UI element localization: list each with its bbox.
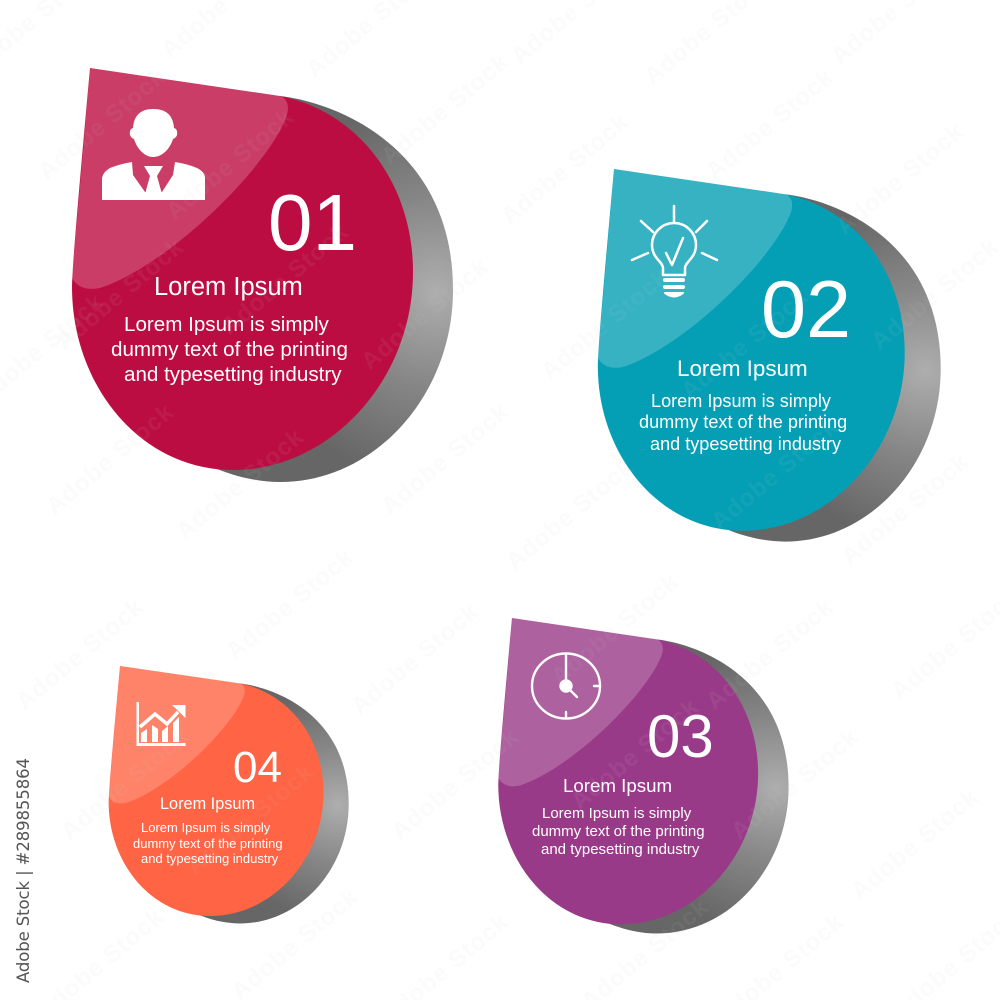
watermark: Adobe Stock	[161, 103, 299, 225]
watermark: Adobe Stock	[11, 593, 149, 715]
watermark: Adobe Stock	[376, 48, 514, 170]
body text 04: dummy text of the printing	[133, 836, 283, 851]
watermark: Adobe Stock	[386, 723, 524, 845]
body text 03	[532, 805, 705, 858]
icon: light bulb with check	[632, 206, 717, 296]
body text 04: Lorem Ipsum is simply	[141, 820, 271, 835]
watermark: Adobe Stock	[496, 108, 634, 230]
watermark: Adobe Stock	[836, 448, 974, 570]
watermark: Adobe Stock	[221, 543, 359, 665]
panel: step 01	[72, 68, 453, 482]
watermark: Adobe Stock	[346, 598, 484, 720]
number 01: 01	[268, 178, 357, 267]
watermark: Adobe Stock	[701, 593, 839, 715]
watermark: Adobe Stock	[216, 218, 354, 340]
drop shape 03	[498, 618, 789, 933]
body text 03: and typesetting industry	[541, 841, 700, 858]
watermark: Adobe Stock	[56, 723, 194, 845]
watermark: Adobe Stock	[356, 253, 494, 375]
body text 01	[111, 313, 348, 386]
watermark: Adobe Stock	[181, 758, 319, 880]
body text 02: dummy text of the printing	[639, 412, 847, 432]
drop shape 04	[109, 666, 349, 924]
watermark: Adobe Stock	[546, 568, 684, 690]
watermark: Adobe Stock	[51, 233, 189, 355]
watermark: Adobe Stock	[501, 453, 639, 575]
body text 01: Lorem Ipsum is simply	[124, 313, 330, 336]
watermark: Adobe Stock	[706, 413, 844, 535]
stock id label: Adobe Stock | #289855864	[14, 758, 33, 983]
number 04: 04	[233, 743, 282, 792]
body text 01: dummy text of the printing	[111, 338, 348, 361]
body text 02	[639, 391, 847, 454]
watermark: Adobe Stock	[846, 783, 984, 905]
body text 03: dummy text of the printing	[532, 823, 705, 840]
watermark: Adobe Stock	[536, 263, 674, 385]
number 02: 02	[761, 265, 851, 355]
body text 04: and typesetting industry	[141, 851, 279, 866]
watermark: Adobe Stock	[676, 283, 814, 405]
icon: clock	[532, 654, 600, 718]
body text 01: and typesetting industry	[124, 363, 342, 386]
panel: step 03	[498, 618, 789, 933]
icon: rising bar chart	[136, 702, 186, 746]
panel: step 02	[598, 169, 941, 542]
watermark: Adobe Stock	[33, 63, 171, 185]
panel: step 04	[109, 666, 349, 924]
watermark: Adobe Stock	[171, 423, 309, 545]
heading 01: Lorem Ipsum	[154, 273, 303, 301]
number 03: 03	[647, 703, 714, 770]
watermark: Adobe Stock	[701, 63, 839, 185]
watermark: Adobe Stock	[41, 398, 179, 520]
body text 04	[133, 820, 283, 866]
icon: businessman	[102, 109, 205, 200]
heading 03: Lorem Ipsum	[563, 775, 672, 796]
body text 03: Lorem Ipsum is simply	[542, 805, 692, 822]
watermark: Adobe Stock	[376, 398, 514, 520]
heading 02: Lorem Ipsum	[677, 356, 808, 381]
watermark: Adobe Stock	[726, 723, 864, 845]
body text 02: Lorem Ipsum is simply	[651, 391, 832, 411]
drop shape 01	[72, 68, 453, 482]
drop shape 02	[598, 169, 941, 542]
heading 04: Lorem Ipsum	[160, 795, 255, 813]
body text 02: and typesetting industry	[650, 434, 842, 454]
watermark: Adobe Stock	[831, 118, 969, 240]
watermark: Adobe Stock	[566, 693, 704, 815]
